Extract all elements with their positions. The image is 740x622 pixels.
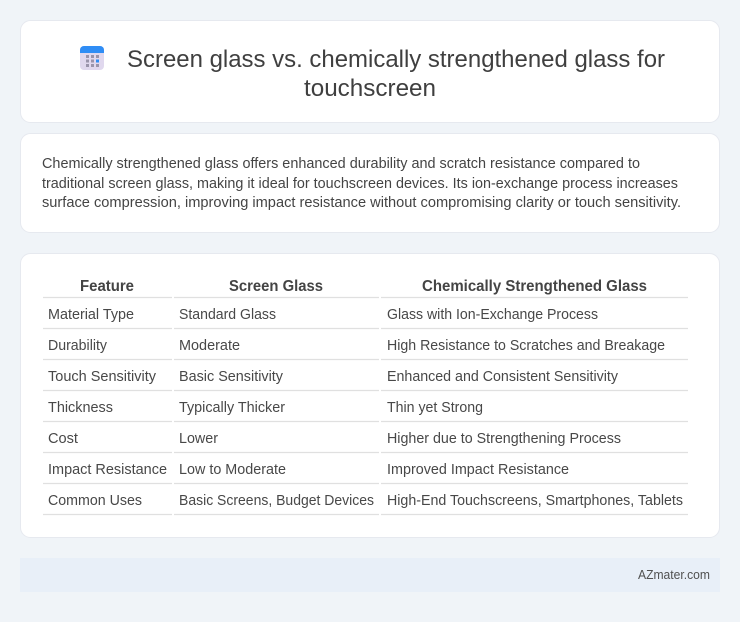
title: Screen glass vs. chemically strengthened glass for — [127, 46, 665, 73]
description text — [42, 156, 681, 211]
row: cost: Cost — [48, 431, 78, 447]
row: material type: Standard Glass — [179, 307, 276, 323]
row: common uses: Basic Screens, Budget Devices — [179, 493, 374, 509]
row: touch sensitivity: Basic Sensitivity — [179, 369, 284, 385]
table header: Feature — [80, 278, 134, 295]
row: cost: Lower — [179, 431, 218, 447]
row: impact resistance: Improved Impact Resistance — [387, 462, 569, 478]
row: touch sensitivity: Touch Sensitivity — [48, 369, 157, 385]
row: impact resistance: Low to Moderate — [179, 462, 286, 478]
title: touchscreen — [304, 75, 436, 102]
row: thickness: Thickness — [48, 400, 113, 416]
row: touch sensitivity — [48, 369, 619, 385]
row: material type: Glass with Ion-Exchange Process — [387, 307, 598, 323]
footer bar — [20, 558, 720, 592]
table header — [80, 278, 647, 295]
panel: title header — [20, 20, 720, 122]
row: thickness — [48, 400, 483, 416]
description text: Chemically strengthened glass offers enhanced durability and scratch resistance compared to — [42, 156, 640, 172]
footer credit: AZmater.com — [638, 568, 710, 582]
row: common uses: High-End Touchscreens, Smartphones, Tablets — [387, 493, 683, 509]
title — [127, 46, 665, 102]
row: impact resistance: Impact Resistance — [48, 462, 167, 478]
row: cost: Higher due to Strengthening Process — [387, 431, 621, 447]
panel: description — [20, 134, 720, 232]
row: durability: High Resistance to Scratches and Breakage — [387, 338, 665, 354]
row: material type: Material Type — [48, 307, 134, 323]
table header: Screen Glass — [229, 278, 323, 295]
description text: traditional screen glass, making it ideal for touchscreen devices. Its ion-exchange process increases — [42, 176, 678, 192]
description text: surface compression, improving impact resistance without compromising clarity or touch sensitivity. — [42, 195, 681, 211]
row: durability — [48, 338, 665, 354]
row: thickness: Typically Thicker — [179, 400, 285, 416]
row: common uses — [48, 493, 683, 509]
row: cost — [48, 431, 621, 447]
row: durability: Durability — [48, 338, 108, 354]
panel: comparison table — [20, 254, 720, 538]
row: impact resistance — [48, 462, 569, 478]
row: common uses: Common Uses — [48, 493, 142, 509]
row: durability: Moderate — [179, 338, 240, 354]
row: touch sensitivity: Enhanced and Consistent Sensitivity — [387, 369, 619, 385]
row: thickness: Thin yet Strong — [387, 400, 483, 416]
row: material type — [48, 307, 598, 323]
icon: calendar — [80, 46, 104, 70]
table header: Chemically Strengthened Glass — [422, 278, 647, 295]
